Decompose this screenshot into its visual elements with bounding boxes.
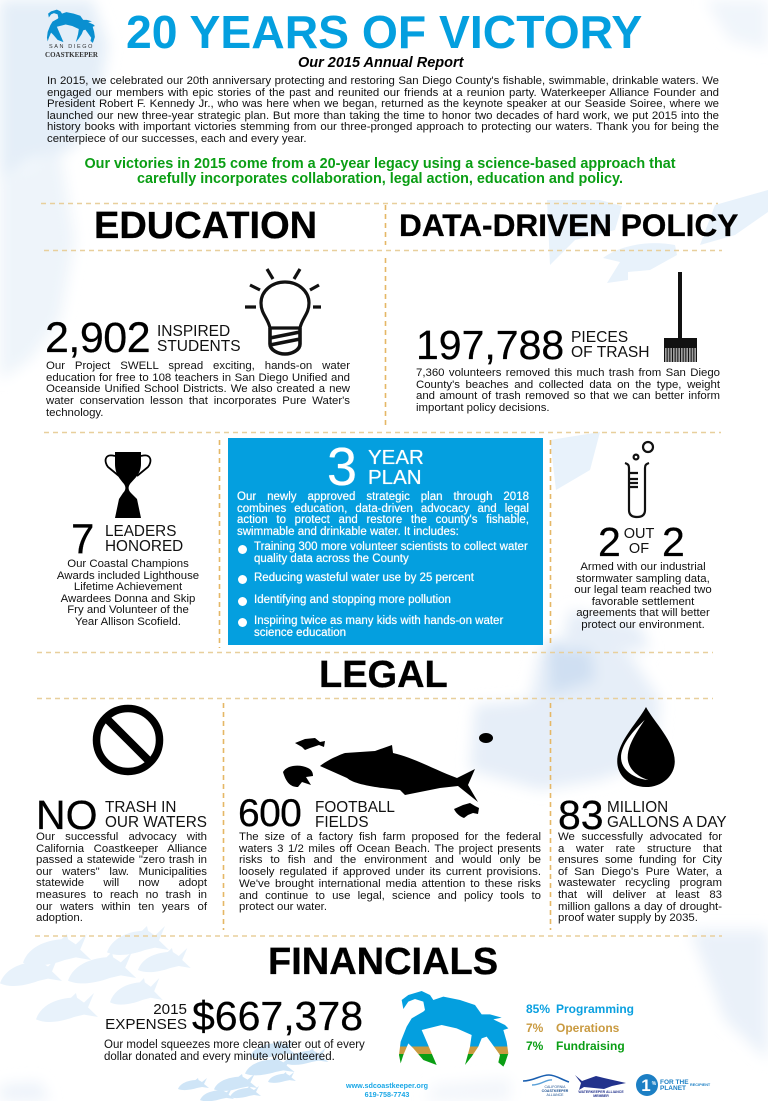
- icon: water drop: [617, 707, 675, 787]
- green tagline: carefully incorporates collaboration, legal action, education and policy.: [137, 171, 623, 187]
- panel: 3 year plan: [228, 438, 543, 645]
- leaders text: Year Allison Scofield.: [75, 616, 181, 628]
- label: STUDENTS: [157, 338, 241, 355]
- legal text 1: California Coastkeeper Alliance: [36, 843, 207, 855]
- label: PIECES: [571, 329, 628, 346]
- contact: [327, 1081, 447, 1099]
- label: HONORED: [105, 538, 183, 555]
- logo: 1% for the planet: FOR THE: [660, 1079, 689, 1086]
- label: [105, 1001, 187, 1033]
- logo: waterkeeper alliance: WATERKEEPER ALLIANCE: [578, 1090, 624, 1094]
- label: GALLONS A DAY: [607, 814, 727, 831]
- leaders text: Awardees Donna and Skip: [61, 592, 195, 604]
- logo: waterkeeper alliance: [574, 1074, 628, 1098]
- logo: 1% for the planet: [635, 1074, 719, 1098]
- policy text: County's beaches and collected data on the type, weight: [416, 379, 720, 391]
- legend: fundraising: 7%: [526, 1039, 543, 1053]
- label: MILLION: [607, 799, 668, 816]
- number: 2: [598, 519, 621, 565]
- label: TRASH IN: [105, 799, 176, 816]
- label: LEADERS: [105, 523, 176, 540]
- label: [105, 799, 207, 831]
- stat: 2,902 inspired students: [45, 314, 241, 362]
- number: 600: [238, 792, 301, 835]
- financial text: Our model squeezes more clean water out of every: [104, 1039, 365, 1051]
- icon: crab logo: [46, 10, 95, 43]
- label: YEAR: [368, 446, 424, 469]
- plan text: action to protect and restore the county's fishable,: [237, 514, 529, 526]
- label: [607, 799, 727, 831]
- settlement text: favorable settlement: [592, 596, 694, 608]
- logo: 1% for the planet: RECIPIENT: [690, 1083, 711, 1087]
- legal text 3: that will deliver at least 83: [558, 889, 722, 901]
- label: EXPENSES: [105, 1016, 187, 1033]
- education text: technology.: [46, 407, 103, 419]
- contact: www.sdcoastkeeper.org: [346, 1081, 428, 1090]
- logo: california coastkeeper alliance: ALLIANCE: [547, 1093, 564, 1097]
- leaders text: Our Coastal Champions: [67, 558, 189, 570]
- title: 20 YEARS OF VICTORY: [126, 6, 642, 58]
- policy text: important policy decisions.: [416, 402, 550, 414]
- bullet 1: quality data across the County: [254, 553, 409, 565]
- contact: 619-758-7743: [365, 1090, 409, 1099]
- stat: 83 million gallons: [558, 792, 727, 838]
- legal text 3: million gallons a day of drought-: [558, 901, 722, 913]
- number 3: 3: [327, 437, 357, 497]
- plan text: [237, 490, 529, 538]
- heading: data-driven policy: DATA-DRIVEN POLICY: [399, 207, 738, 243]
- icon: broom: [664, 272, 697, 362]
- logo: 1% for the planet: 1: [641, 1076, 651, 1095]
- legal text 2: We've brought international media attention to these risks: [239, 878, 541, 890]
- settlement text: [574, 561, 712, 631]
- policy text: [416, 367, 720, 414]
- leaders text: Fry and Volunteer of the: [67, 604, 189, 616]
- subtitle: Our 2015 Annual Report: [298, 55, 463, 71]
- legend: Operations: [556, 1021, 619, 1035]
- icon: fish: [283, 733, 493, 818]
- leaders text: Lifetime Achievement: [74, 581, 182, 593]
- legal text 1: [36, 831, 208, 924]
- logo: california coastkeeper alliance: COASTKEEPER: [542, 1089, 569, 1093]
- legal text 1: Our successful advocacy with: [36, 831, 207, 843]
- logo: california coastkeeper alliance: CALIFORNIA: [544, 1085, 566, 1089]
- settlement text: protect our environment.: [581, 619, 705, 631]
- heading: financials: FINANCIALS: [268, 941, 498, 983]
- legal text 2: and continue to use legal, science and policy tools to: [239, 890, 541, 902]
- label: FOOTBALL: [315, 799, 395, 816]
- label: INSPIRED: [157, 323, 230, 340]
- icon: trophy: [104, 452, 152, 518]
- heading: legal: LEGAL: [319, 654, 448, 696]
- label: OUT: [624, 526, 654, 542]
- legend: Fundraising: [556, 1039, 625, 1053]
- legal text 2: [239, 831, 541, 913]
- legal text 1: statewide will now adopt: [36, 877, 207, 889]
- legend: Programming: [556, 1002, 634, 1016]
- legal text 1: our waters within ten years of: [36, 901, 207, 913]
- heading: education: EDUCATION: [94, 205, 317, 247]
- label: [368, 446, 424, 488]
- stat: 197,788 pieces of trash: [416, 322, 650, 368]
- label: [571, 329, 650, 361]
- stat: 600 football fields: [238, 792, 395, 835]
- legal text 2: risks to fish and the environment and would only be: [239, 854, 541, 866]
- legal text 3: proof water supply by 2035.: [558, 912, 698, 924]
- intro text: In 2015, we celebrated our 20th anniversary protecting and restoring San Diego County's fishable, swimmable, drinkable waters. We: [47, 75, 719, 87]
- intro text: launched our new three-year strategic plan. But more than taking the time to honor two decades of hard work, we put 2015 into the: [47, 110, 719, 122]
- label: [157, 323, 241, 355]
- education text: water conservation lesson that incorporates Pure Water's: [46, 395, 350, 407]
- intro text: centerpiece of our successes, each and every year.: [47, 133, 307, 145]
- bullet 2: Reducing wasteful water use by 25 percent: [254, 572, 474, 584]
- stat: no trash: [36, 792, 207, 838]
- bullet 4: Inspiring twice as many kids with hands-on water: [254, 615, 503, 627]
- label: OF: [629, 541, 649, 557]
- legend: [526, 1002, 646, 1054]
- legal text 3: a water rate structure that: [558, 843, 722, 855]
- bullet 1: Training 300 more volunteer scientists to collect water: [254, 541, 528, 553]
- bullet 3: Identifying and stopping more pollution: [254, 594, 451, 606]
- label: 2015: [153, 1001, 187, 1018]
- bullet 1: [238, 540, 528, 565]
- partner logos: [522, 1074, 718, 1098]
- intro text: [47, 75, 719, 145]
- financial text: dollar donated and every minute volunteered.: [104, 1051, 335, 1063]
- education text: [46, 360, 350, 419]
- logo: San Diego Coastkeeper: COASTKEEPER: [45, 51, 98, 59]
- legal text 1: our waters" law. Municipalities: [36, 866, 207, 878]
- education text: Our Project SWELL spread exciting, hands-on water: [46, 360, 350, 372]
- number: 197,788: [416, 322, 564, 368]
- icon: light bulb: [245, 268, 321, 356]
- icon: test tube: [624, 440, 654, 518]
- number: 7: [71, 515, 94, 562]
- amount: $667,378: [192, 993, 363, 1039]
- green tagline: Our victories in 2015 come from a 20-year legacy using a science-based approach that: [84, 156, 676, 172]
- policy text: and amount of trash removed so that we can better inform: [416, 390, 720, 402]
- logo: waterkeeper alliance: MEMBER: [593, 1094, 609, 1098]
- intro text: history books with important victories stemming from our three-pronged approach to protecting our waters. Thank you for being the: [47, 121, 719, 133]
- settlement text: stormwater sampling data,: [576, 573, 710, 585]
- legal text 1: adoption.: [36, 912, 83, 924]
- logo: 1% for the planet: PLANET: [660, 1085, 686, 1092]
- label: OF TRASH: [571, 344, 650, 361]
- plan text: Our newly approved strategic plan through 2018: [237, 491, 529, 503]
- icon: no symbol: [92, 704, 164, 776]
- crab chart: [390, 985, 520, 1075]
- education text: Oceanside Unified School Districts. We also created a new: [46, 383, 350, 395]
- legend: operations: 7%: [526, 1021, 543, 1035]
- label: [624, 526, 654, 557]
- financial text: [104, 1039, 365, 1063]
- bullet 4: science education: [254, 627, 346, 639]
- number: 83: [558, 792, 604, 838]
- logo: california coastkeeper alliance: [522, 1074, 572, 1098]
- legal text 2: waters 3 1/2 miles off Ocean Beach. The project presents: [239, 843, 541, 855]
- number: 2,902: [45, 314, 150, 362]
- plan text: swimmable and drinkable water. It includes:: [237, 526, 459, 538]
- legal text 3: We successfully advocated for: [558, 831, 722, 843]
- leaders text: [56, 558, 199, 628]
- intro text: engaged our members with epic stories of the past and reunited our friends at a reunion party. Waterkeeper Alliance Founder and: [47, 87, 719, 99]
- label: PLAN: [368, 466, 422, 488]
- stat: expenses: [105, 993, 363, 1039]
- settlement text: our legal team reached two: [574, 584, 712, 596]
- legal text 3: of San Diego's Pure Water, a: [558, 866, 722, 878]
- legal text 1: passed a statewide "zero trash in: [36, 854, 207, 866]
- green tagline: [84, 156, 676, 187]
- bullet 4: [238, 614, 504, 639]
- legal text 2: protect our water.: [239, 901, 327, 913]
- legend: programming: 85%: [526, 1002, 550, 1016]
- legal text 2: loosely regulated if approved under its current provisions.: [239, 866, 541, 878]
- label: [105, 523, 183, 555]
- settlement text: agreements that will better: [576, 607, 710, 619]
- intro text: President Robert F. Kennedy Jr., who was here when we began, returned as the keynote speaker at our Seaside Soiree, where we: [47, 98, 719, 110]
- stat: 2 out of 2: [598, 519, 685, 565]
- label: FIELDS: [315, 814, 369, 831]
- stat: 7 leaders honored: [71, 515, 183, 562]
- legal text 1: measures to reach no trash in: [36, 889, 207, 901]
- number: NO: [36, 792, 98, 838]
- logo wordmark: SAN DIEGO: [49, 44, 94, 50]
- policy text: 7,360 volunteers removed this much trash from San Diego: [416, 367, 720, 379]
- legal text 3: ensures some funding for City: [558, 854, 722, 866]
- label: [315, 799, 395, 831]
- number: 2: [662, 519, 685, 565]
- logo: 1% for the planet: %: [652, 1081, 657, 1087]
- legal text 3: [558, 831, 722, 924]
- label: OUR WATERS: [105, 814, 207, 831]
- plan text: combines education, data-driven advocacy and legal: [237, 503, 529, 515]
- legal text 3: wastewater recycling program: [558, 877, 722, 889]
- logo: San Diego Coastkeeper: [45, 10, 98, 59]
- leaders text: Awards included Lighthouse: [57, 570, 199, 582]
- legal text 2: The size of a factory fish farm proposed for the federal: [239, 831, 541, 843]
- education text: education for free to 108 teachers in San Diego Unified and: [46, 372, 350, 384]
- settlement text: Armed with our industrial: [580, 561, 706, 573]
